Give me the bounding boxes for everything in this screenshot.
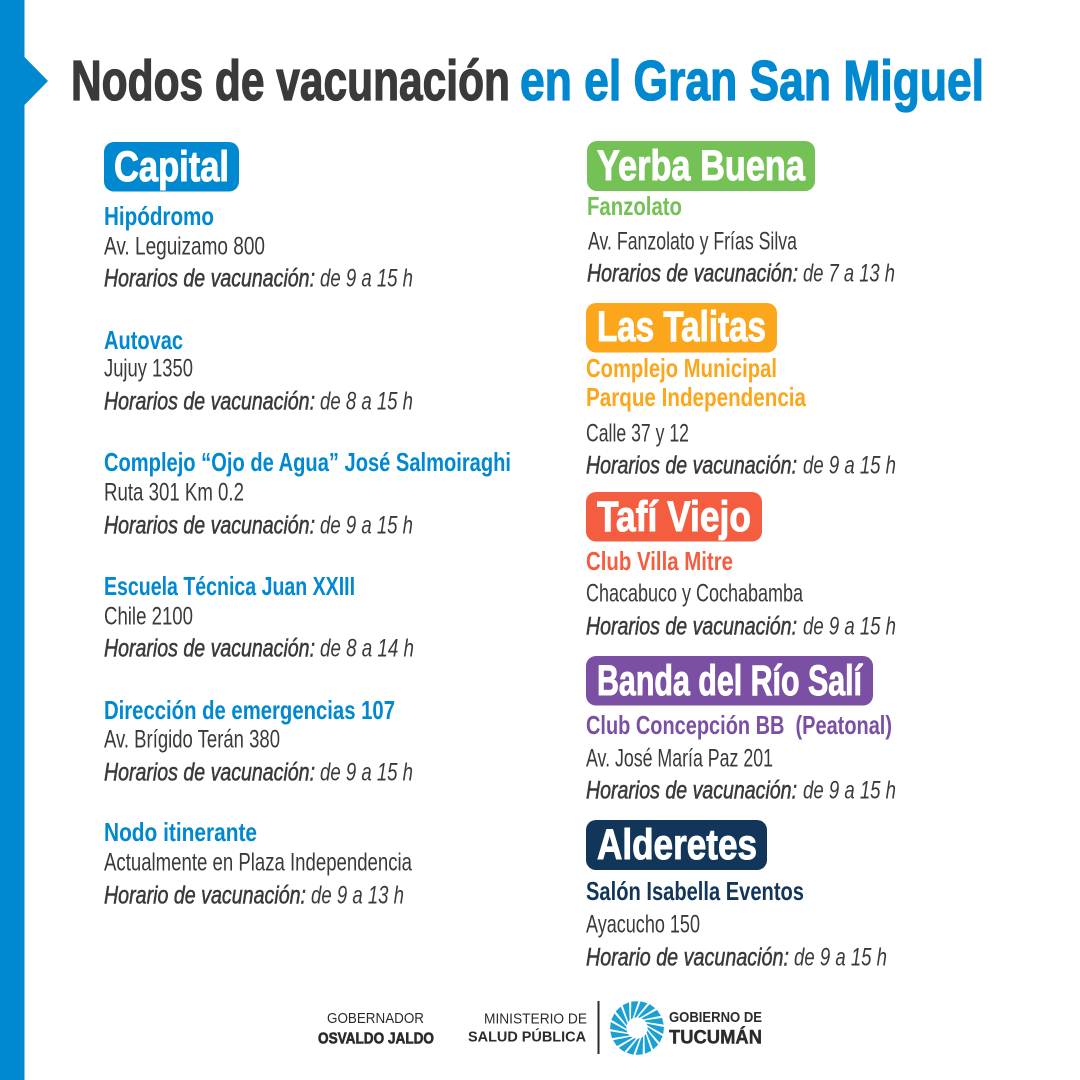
- badge: Alderetes: Alderetes: [597, 821, 757, 869]
- logo: Gobierno de Tucumán: GOBIERNO DE: [669, 1009, 762, 1026]
- node: Fanzolato: [587, 191, 895, 287]
- node: Autovac: Autovac: [104, 325, 183, 355]
- node: Escuela Técnica: de 8 a 14 h: [320, 634, 414, 662]
- badge: Yerba Buena: Yerba Buena: [597, 142, 806, 190]
- node: Complejo Ojo de Agua: Complejo “Ojo de Agua” José Salmoiraghi: [104, 447, 511, 477]
- node: Club Villa Mitre: [586, 546, 896, 640]
- node: Complejo Municipal: Complejo Municipal: [586, 353, 777, 383]
- logo: Ministerio de Salud Pública: SALUD PÚBLICA: [468, 1028, 586, 1046]
- node: Fanzolato: de 7 a 13 h: [803, 259, 895, 287]
- node: Nodo itinerante: de 9 a 13 h: [311, 881, 404, 909]
- node: Club Concepción BB: [586, 710, 896, 804]
- node: Complejo Ojo de Agua: Horarios de vacunación:: [104, 511, 315, 539]
- node: Hipódromo: Horarios de vacunación:: [104, 264, 315, 292]
- node: Salón Isabella Eventos: Horario de vacunación:: [586, 943, 789, 971]
- logo: Gobernador Osvaldo Jaldo: [318, 1010, 434, 1048]
- node: Dirección de emergencias: Dirección de emergencias 107: [104, 695, 395, 725]
- node: Complejo Ojo de Agua: de 9 a 15 h: [320, 511, 413, 539]
- logo: Gobernador Osvaldo Jaldo: OSVALDO JALDO: [318, 1030, 434, 1048]
- badge: Las Talitas: Las Talitas: [597, 303, 766, 351]
- node: Complejo Municipal: Parque Independencia: [586, 382, 806, 412]
- node: Autovac: de 8 a 15 h: [320, 387, 413, 415]
- node: Autovac: Horarios de vacunación:: [104, 387, 315, 415]
- node: Club Concepción BB: de 9 a 15 h: [803, 776, 896, 804]
- title: Nodos de vacunación: [71, 49, 510, 113]
- node: Escuela Técnica: Chile 2100: [104, 602, 193, 630]
- node: Hipódromo: Hipódromo: [104, 201, 214, 231]
- node: Club Concepción BB: Horarios de vacunación:: [586, 776, 797, 804]
- node: Club Concepción BB: Club Concepción BB (Peatonal): [586, 710, 892, 740]
- logo: Gobierno de Tucumán: TUCUMÁN: [669, 1026, 762, 1048]
- node: Hipódromo: [104, 201, 413, 292]
- node: Dirección de emergencias: de 9 a 15 h: [320, 758, 413, 786]
- logo: Ministerio de Salud Pública: MINISTERIO DE: [484, 1010, 587, 1028]
- node: Hipódromo: de 9 a 15 h: [320, 264, 413, 292]
- node: Fanzolato: Fanzolato: [587, 191, 682, 221]
- node: Club Concepción BB: Av. José María Paz 201: [586, 744, 773, 772]
- panel: Alderetes: [586, 820, 887, 971]
- panel: Las Talitas: [586, 303, 896, 479]
- panel: Capital: [104, 142, 511, 909]
- node: Complejo Municipal: Calle 37 y 12: [586, 419, 689, 447]
- node: Escuela Técnica: Escuela Técnica Juan XXIII: [104, 571, 355, 601]
- node: Club Villa Mitre: de 9 a 15 h: [803, 612, 896, 640]
- node: Fanzolato: Horarios de vacunación:: [587, 259, 798, 287]
- badge: Tafí Viejo: Tafí Viejo: [597, 493, 751, 541]
- node: Salón Isabella Eventos: Ayacucho 150: [586, 910, 700, 938]
- node: Escuela Técnica: [104, 571, 414, 662]
- node: Salón Isabella Eventos: [586, 876, 887, 971]
- node: Autovac: [104, 325, 413, 415]
- node: Club Villa Mitre: Chacabuco y Cochabamba: [586, 579, 803, 607]
- node: Complejo Municipal: Horarios de vacunación:: [586, 451, 797, 479]
- badge: Capital: Capital: [114, 143, 229, 191]
- node: Fanzolato: Av. Fanzolato y Frías Silva: [588, 227, 797, 255]
- panel: Tafí Viejo: [586, 492, 896, 640]
- node: Complejo Ojo de Agua: [104, 447, 511, 539]
- node: Hipódromo: Av. Leguizamo 800: [104, 232, 265, 260]
- node: Complejo Ojo de Agua: Ruta 301 Km 0.2: [104, 478, 244, 506]
- node: Nodo itinerante: Actualmente en Plaza Independencia: [104, 848, 412, 876]
- logo: Ministerio de Salud Pública: [468, 1001, 600, 1054]
- title: [71, 49, 984, 113]
- node: Salón Isabella Eventos: Salón Isabella Eventos: [586, 876, 804, 906]
- badge: Banda del Río Salí: [586, 656, 873, 706]
- logo: Gobierno de Tucumán: [610, 1000, 762, 1056]
- node: Autovac: Jujuy 1350: [104, 354, 193, 382]
- node: Nodo itinerante: Horario de vacunación:: [104, 881, 306, 909]
- node: Complejo Municipal: de 9 a 15 h: [803, 451, 896, 479]
- node: Salón Isabella Eventos: de 9 a 15 h: [794, 943, 887, 971]
- node: Club Villa Mitre: Horarios de vacunación:: [586, 612, 797, 640]
- node: Nodo itinerante: Nodo itinerante: [104, 817, 257, 847]
- badge: Banda del Río Salí: Banda del Río Salí: [597, 657, 863, 705]
- node: Dirección de emergencias: [104, 695, 413, 786]
- node: Club Villa Mitre: Club Villa Mitre: [586, 546, 733, 576]
- sidebar with arrow: [0, 0, 48, 1080]
- node: Dirección de emergencias: Av. Brígido Terán 380: [104, 725, 280, 753]
- panel: Yerba Buena: [587, 141, 895, 287]
- node: Escuela Técnica: Horarios de vacunación:: [104, 634, 315, 662]
- node: Complejo Municipal: [586, 353, 896, 479]
- icon: Tucumán sun: [610, 1000, 664, 1056]
- node: Nodo itinerante: [104, 817, 412, 909]
- footer logos: [318, 1000, 762, 1056]
- node: Dirección de emergencias: Horarios de vacunación:: [104, 758, 315, 786]
- panel: Banda del Río Salí: [586, 656, 896, 804]
- logo: Gobernador Osvaldo Jaldo: GOBERNADOR: [327, 1010, 424, 1027]
